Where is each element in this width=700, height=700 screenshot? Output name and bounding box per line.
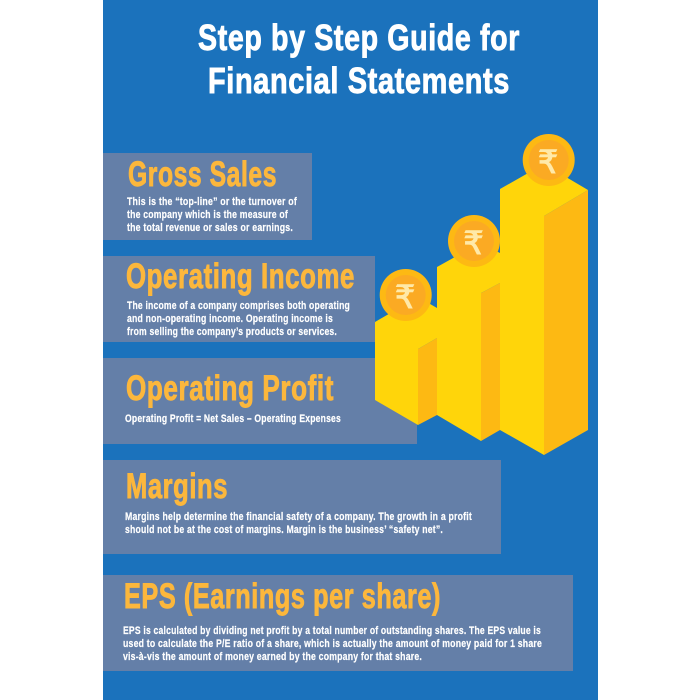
icon: rupee coin 3: ₹ [538,143,558,181]
text block: margins: should not be at the cost of margins. Margin is the business’ “safety net”. [125,524,443,536]
heading: gross sales: Gross Sales [128,155,277,194]
title: Financial Statements [208,60,510,101]
text block: margins [125,511,472,536]
text block: gross sales: the company which is the measure of [127,209,288,221]
panel: gross sales [103,153,312,240]
text block: operating profit: Operating Profit = Net Sales – Operating Expenses [125,413,341,425]
text block: operating income: The income of a company comprises both operating [127,300,350,312]
text block: gross sales: the total revenue or sales or earnings. [127,222,293,234]
text block: operating income: and non-operating income. Operating income is [127,313,333,325]
heading: margins: Margins [126,467,228,506]
panel: margins [103,460,501,554]
icon: rupee coin 3 [523,134,575,186]
text block: eps: used to calculate the P/E ratio of a share, which is actually the amount of money paid for 1 share [123,638,542,650]
text block: gross sales [127,196,297,234]
heading: eps: EPS (Earnings per share) [124,577,441,616]
text block: gross sales: This is the “top-line” or the turnover of [127,196,297,208]
bar 1 [375,297,437,425]
panel: operating income [103,256,375,342]
icon: rupee coin 2: ₹ [463,224,484,262]
text block: operating income: from selling the company’s products or services. [127,326,337,338]
heading: operating income: Operating Income [126,257,355,296]
icon: rupee coin 2 [448,215,500,267]
bar 2 [437,243,500,441]
text block: eps [123,625,542,663]
title [198,17,520,101]
icon: rupee coin 1: ₹ [395,278,415,316]
text block: operating income [127,300,350,338]
text block: margins: Margins help determine the financial safety of a company. The growth in a profit [125,511,472,523]
chart: rising gold bars with rupee coins [375,134,588,455]
text block: eps: EPS is calculated by dividing net profit by a total number of outstanding shares. The EPS value is [123,625,541,637]
panel: operating profit [103,358,417,444]
title: Step by Step Guide for [198,17,520,58]
heading: operating profit: Operating Profit [126,369,334,408]
bar 3 [500,164,588,455]
panel: eps [103,575,573,671]
icon: rupee coin 1 [380,269,432,321]
background panel [103,0,598,700]
text block: eps: vis-à-vis the amount of money earned by the company for that share. [123,651,422,663]
